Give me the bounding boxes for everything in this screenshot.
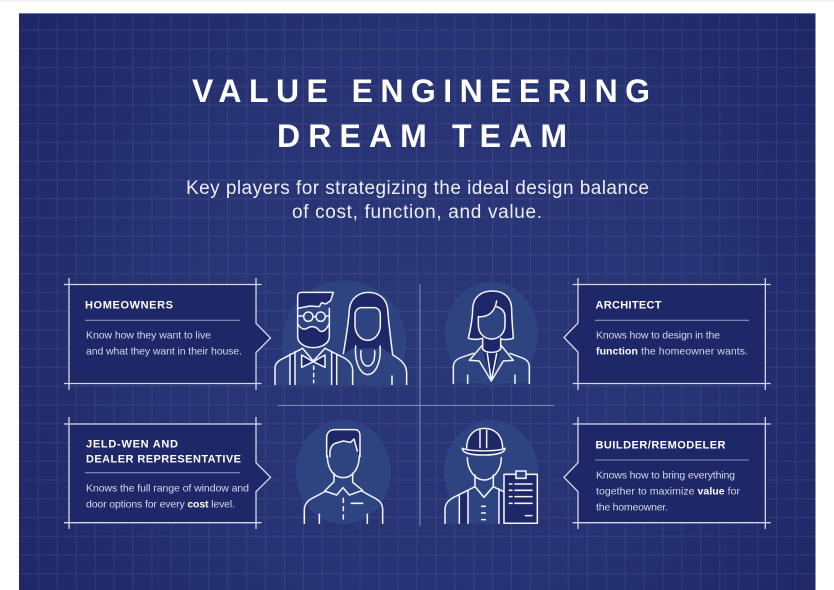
panel: builder/remodeler: BUILDER/REMODELER — [596, 440, 726, 452]
panel: homeowners: HOMEOWNERS — [85, 300, 173, 312]
panel: builder/remodeler: Knows how to bring everything — [596, 469, 735, 481]
panel: jeld-wen and dealer representative: door options for every cost level. — [86, 499, 235, 511]
panel: homeowners — [64, 278, 270, 390]
woman figure — [343, 292, 407, 387]
subtitle — [186, 178, 649, 223]
panel: builder/remodeler: together to maximize value for — [596, 485, 740, 497]
icon: architect — [445, 282, 538, 385]
subtitle: of cost, function, and value. — [292, 202, 542, 223]
panel: architect — [564, 278, 771, 390]
panel: jeld-wen and dealer representative: Knows the full range of window and — [86, 483, 249, 495]
panel: jeld-wen and dealer representative: JELD-WEN AND — [86, 439, 178, 451]
panel: architect: function the homeowner wants. — [596, 346, 748, 358]
panel: jeld-wen and dealer representative — [64, 417, 270, 529]
center crosshair divider — [278, 284, 554, 526]
title — [192, 73, 650, 154]
panel: builder/remodeler — [564, 417, 771, 529]
icon: builder/remodeler — [444, 420, 538, 524]
panel: builder/remodeler: the homeowner. — [596, 501, 668, 513]
panel: architect: Knows how to design in the — [596, 330, 720, 342]
panel: homeowners: Know how they want to live — [86, 330, 211, 342]
panel: architect: ARCHITECT — [596, 300, 662, 312]
icon: dealer representative — [296, 420, 391, 524]
title: VALUE ENGINEERING — [192, 73, 650, 109]
panel: homeowners: and what they want in their house. — [86, 346, 242, 358]
subtitle: Key players for strategizing the ideal design balance — [186, 178, 649, 199]
icon: homeowners couple — [274, 280, 408, 385]
panel: jeld-wen and dealer representative: DEALER REPRESENTATIVE — [86, 454, 241, 466]
man figure — [275, 292, 353, 385]
title: DREAM TEAM — [277, 118, 567, 154]
